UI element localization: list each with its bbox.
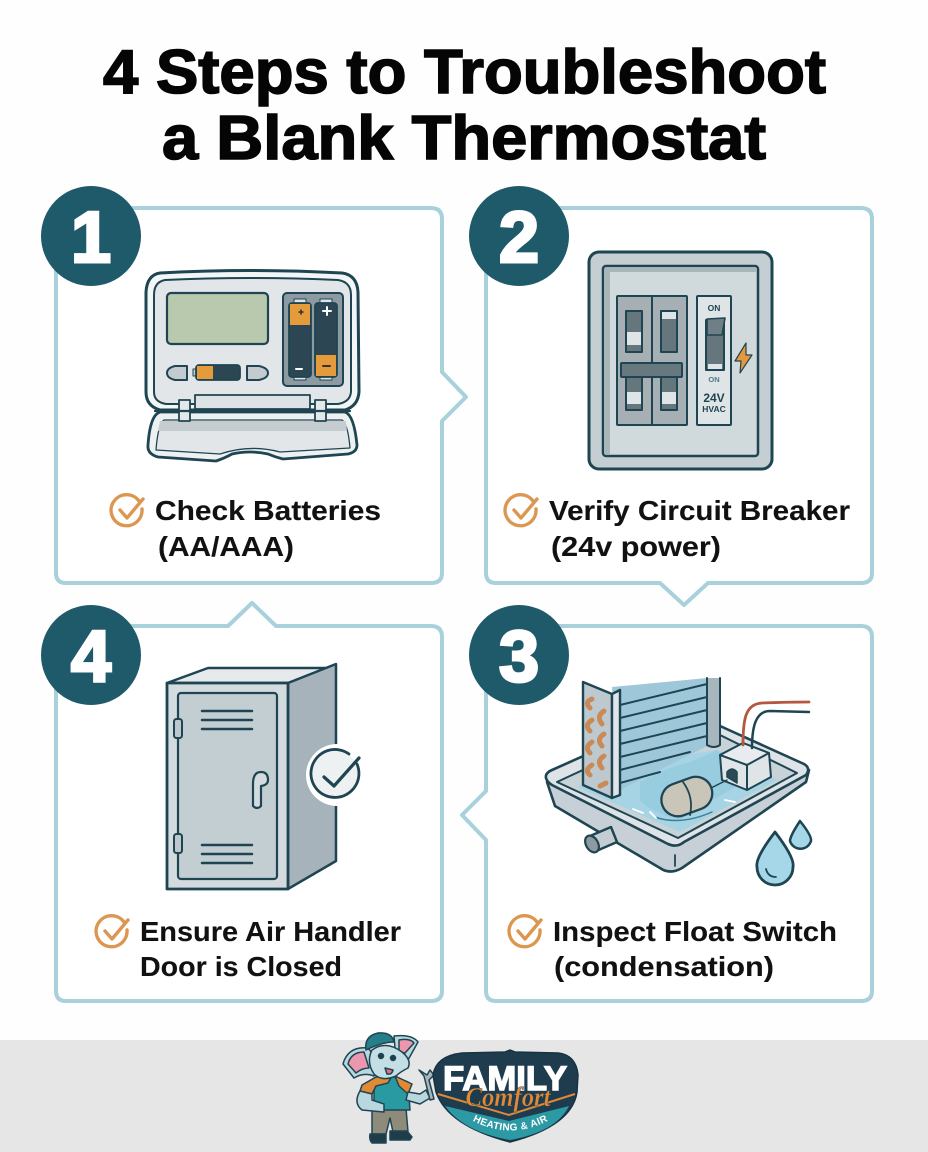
- panel: step 1 check batteries: [41, 186, 466, 583]
- icon: circuit breaker panel: [589, 252, 772, 469]
- card outline 1 with right arrow: [56, 208, 466, 583]
- step 3 text: [553, 916, 837, 982]
- number badge 3: [469, 605, 569, 705]
- number badge 3: 3: [499, 617, 539, 697]
- panel: step 2 verify circuit breaker: [469, 186, 872, 605]
- pan outer body: [547, 726, 809, 872]
- footer band: [0, 1040, 928, 1152]
- icon: drain pan with float switch: [546, 678, 811, 885]
- icon: circuit breaker panel: ON: [708, 375, 720, 384]
- step 1 text: [155, 495, 381, 562]
- card outline 4 with top arrow: [56, 603, 442, 1001]
- step 1 text: (AA/AAA): [158, 531, 294, 562]
- check icon 2: [505, 495, 537, 526]
- mascot: elephant: [343, 1033, 434, 1143]
- drain pipe: [588, 827, 617, 852]
- step 4 text: Door is Closed: [140, 951, 342, 982]
- icon: thermostat with batteries: [146, 270, 359, 461]
- title: a Blank Thermostat: [162, 104, 766, 173]
- switch box: [720, 743, 771, 790]
- card outline 3 with left arrow: [462, 626, 872, 1001]
- check icon 4: [96, 916, 128, 947]
- step 2 text: Verify Circuit Breaker: [549, 495, 850, 526]
- check icon 1: [111, 495, 143, 526]
- step 1 text: Check Batteries: [155, 495, 381, 526]
- number badge 2: [469, 186, 569, 286]
- step 2 text: [549, 495, 850, 562]
- step 4 text: [140, 916, 401, 982]
- card outline 2 with bottom arrow: [486, 208, 872, 605]
- icon: circuit breaker panel: 24V: [703, 391, 725, 405]
- number badge 1: [41, 186, 141, 286]
- number badge 4: [41, 605, 141, 705]
- float capsule: [657, 772, 717, 821]
- number badge 1: 1: [71, 198, 111, 278]
- badge: Family Comfort: HEATING & AIR: [473, 1114, 548, 1130]
- icon: circuit breaker panel: ON: [708, 303, 720, 313]
- number badge 4: 4: [71, 617, 111, 697]
- number badge 2: 2: [499, 198, 539, 278]
- icon: circuit breaker panel: HVAC: [702, 404, 726, 414]
- check icon 3: [509, 916, 541, 947]
- logo: Family Comfort mascot and badge: [342, 1032, 579, 1144]
- step 3 text: Inspect Float Switch: [553, 916, 837, 947]
- badge: Family Comfort: Comfort: [466, 1082, 552, 1112]
- icon: air handler cabinet: [167, 664, 368, 889]
- step 2 text: (24v power): [551, 531, 721, 562]
- step 4 text: Ensure Air Handler: [140, 916, 401, 947]
- step 3 text: (condensation): [554, 951, 774, 982]
- panel: step 3 inspect float switch: [462, 605, 872, 1001]
- badge: Family Comfort: [432, 1049, 579, 1143]
- panel: step 4 air handler door: [41, 603, 442, 1001]
- title: [103, 38, 826, 173]
- title: 4 Steps to Troubleshoot: [103, 38, 826, 107]
- badge: Family Comfort: FAMILY: [443, 1060, 567, 1098]
